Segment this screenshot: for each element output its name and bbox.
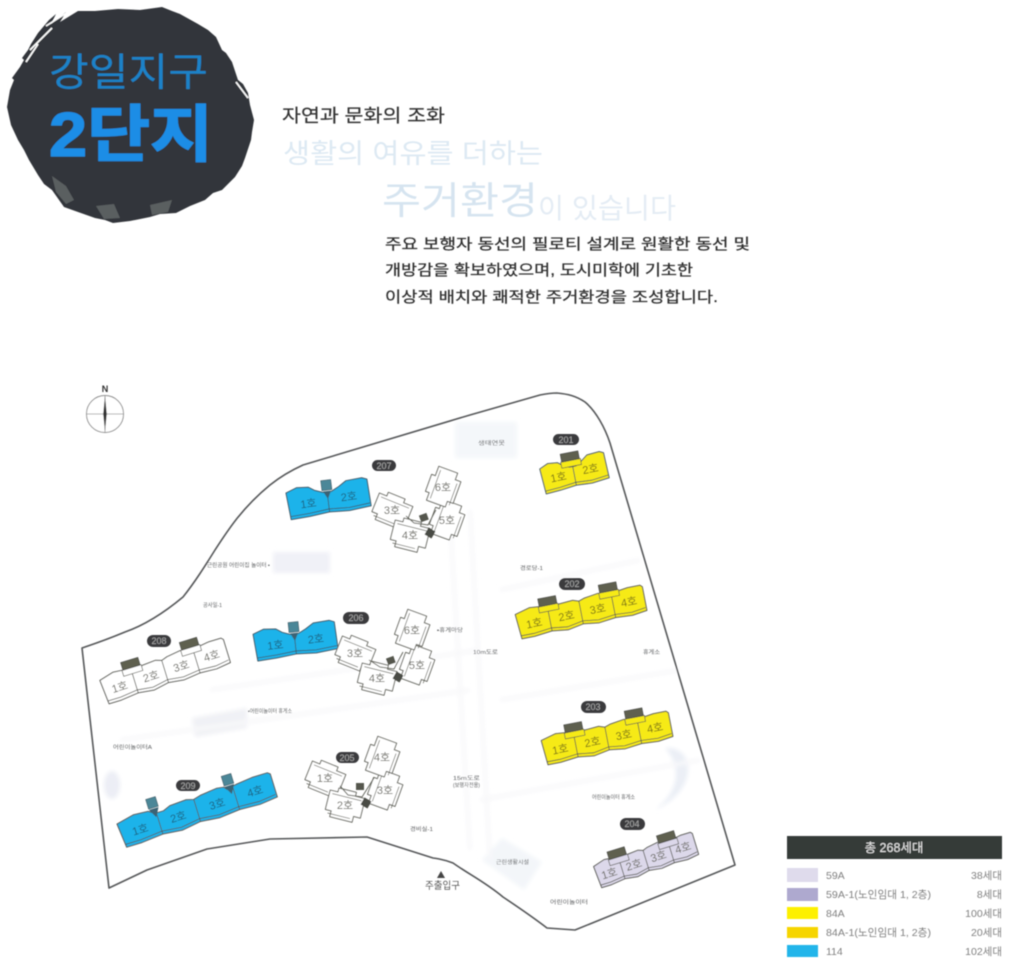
small facility labels: 생태연못 xyxy=(478,439,505,447)
main entrance label with arrow: 주출입구 xyxy=(425,879,460,892)
building 207 blue: 5호 xyxy=(439,514,455,527)
site boundary xyxy=(82,393,735,930)
legend row 114: 102세대 xyxy=(965,946,1002,958)
building 201 yellow: 2호 xyxy=(581,461,600,477)
building 208 white xyxy=(96,630,232,704)
badge: ink circle with title xyxy=(7,7,254,223)
building 206 blue: 206 xyxy=(348,613,364,623)
title: district name: 강일지구 xyxy=(49,52,208,95)
small facility labels: 어린이놀이터 휴게소 xyxy=(592,793,635,801)
small facility labels: 경로당-1 xyxy=(520,565,543,572)
building 204 lavender: 2호 xyxy=(624,857,644,874)
heading block xyxy=(282,106,676,224)
building 207 blue: 4호 xyxy=(402,529,418,542)
building 203 yellow: 1호 xyxy=(551,742,570,758)
small facility labels: ▪휴게마당 xyxy=(437,626,463,634)
legend row 59A-1: 8세대 xyxy=(977,889,1002,901)
legend row 84A xyxy=(787,907,1002,920)
building 206 blue: 5호 xyxy=(409,659,425,672)
legend row 84A: 84A xyxy=(826,908,845,920)
building 207 blue: 2호 xyxy=(340,489,358,504)
legend row 59A-1: 59A-1(노인임대 1, 2층) xyxy=(826,888,931,901)
small facility labels: 15m도로 xyxy=(453,775,480,782)
building 202 yellow: 4호 xyxy=(620,594,638,610)
title: complex number: 2단지 xyxy=(49,101,213,170)
building 207 blue: 1호 xyxy=(300,496,317,511)
faint site background features xyxy=(104,422,700,890)
building 209 blue: 2호 xyxy=(169,809,188,826)
building 202 yellow: 1호 xyxy=(525,616,544,632)
building 209 blue: 3호 xyxy=(208,796,227,813)
small facility labels: ▪어린이놀이터 휴게소 xyxy=(248,707,292,715)
building 202 yellow: 202 xyxy=(564,579,580,589)
building 207 blue: 6호 xyxy=(435,481,451,494)
ink blob xyxy=(7,7,254,223)
small facility labels: 어린이놀이터A xyxy=(113,743,152,751)
pale heading line two: 주거환경 xyxy=(382,181,538,223)
legend header xyxy=(787,836,1002,859)
building 202 yellow: 3호 xyxy=(589,601,607,617)
building 204 lavender: 3호 xyxy=(649,848,668,865)
building 204 lavender: 4호 xyxy=(673,840,693,857)
small facility labels: 경비실-1 xyxy=(410,825,433,833)
description text: 개방감을 확보하였으며, 도시미학에 기초한 xyxy=(385,262,693,279)
building 205 white: 205 xyxy=(339,753,355,763)
building 205 white: 3호 xyxy=(377,784,393,797)
building 205 white: 1호 xyxy=(317,772,333,785)
small facility labels: 어린이놀이터 xyxy=(550,898,588,906)
legend header: 총 268세대 xyxy=(865,841,923,855)
building 209 blue: 4호 xyxy=(246,783,265,800)
ink blob white streaks xyxy=(26,12,248,98)
building 201 yellow: 201 xyxy=(558,435,574,445)
description text: 주요 보행자 동선의 필로티 설계로 원활한 동선 및 xyxy=(385,236,750,253)
building 203 yellow: 2호 xyxy=(583,734,602,750)
legend row 84A-1: 84A-1(노인임대 1, 2층) xyxy=(826,926,931,939)
building 207 blue: 207 xyxy=(376,461,392,471)
small facility labels: 10m도로 xyxy=(473,649,498,656)
pale heading line one: 생활의 여유를 더하는 xyxy=(283,139,543,169)
building 204 lavender xyxy=(590,818,700,888)
building 202 yellow: 2호 xyxy=(557,608,576,624)
building 208 white: 208 xyxy=(151,636,167,646)
legend row 84A-1 xyxy=(787,926,1002,939)
building 205 white xyxy=(303,735,405,824)
site plan xyxy=(82,393,735,930)
building 207 blue: 3호 xyxy=(384,504,400,517)
building 206 blue: 4호 xyxy=(369,672,385,685)
building 206 blue: 3호 xyxy=(347,647,363,660)
building 204 lavender: 204 xyxy=(624,819,640,829)
icon: north compass: N xyxy=(102,384,108,394)
building 208 white: 1호 xyxy=(110,679,129,696)
small facility labels: 근린생활시설 xyxy=(496,858,529,866)
building 203 yellow: 203 xyxy=(585,702,601,712)
small facility labels: 공사일-1 xyxy=(203,601,222,609)
building 203 yellow: 4호 xyxy=(646,720,664,736)
building 208 white: 4호 xyxy=(202,648,221,665)
building 206 blue: 1호 xyxy=(267,638,284,653)
building 206 blue xyxy=(252,608,437,697)
building 207 blue xyxy=(285,460,467,554)
building 208 white: 2호 xyxy=(141,668,161,685)
building 206 blue: 2호 xyxy=(307,632,325,647)
legend row 59A-1 xyxy=(787,888,1002,901)
building 209 blue: 1호 xyxy=(131,821,150,839)
ink blob lighter patches xyxy=(52,176,172,219)
legend row 59A: 59A xyxy=(826,870,845,882)
building 209 blue xyxy=(113,763,278,848)
building 204 lavender: 1호 xyxy=(600,865,619,882)
building 201 yellow xyxy=(538,434,610,494)
building 209 blue: 209 xyxy=(180,781,196,791)
description text xyxy=(385,236,750,306)
small facility labels: 휴게소 xyxy=(643,648,660,656)
building 205 white: 4호 xyxy=(374,751,390,764)
building 208 white: 3호 xyxy=(172,658,191,675)
small facility labels: (보행자전용) xyxy=(453,781,480,789)
building 202 yellow xyxy=(513,577,648,639)
heading line: 자연과 문화의 조화 xyxy=(282,106,445,126)
building 205 white: 2호 xyxy=(337,799,353,812)
description text: 이상적 배치와 쾌적한 주거환경을 조성합니다. xyxy=(385,289,718,306)
legend row 84A-1: 20세대 xyxy=(971,927,1002,939)
small facility labels xyxy=(113,439,660,906)
building 203 yellow: 3호 xyxy=(615,727,633,743)
legend row 114: 114 xyxy=(826,946,843,958)
building 201 yellow: 1호 xyxy=(549,470,568,485)
legend row 59A xyxy=(787,868,1002,882)
legend row 114 xyxy=(787,945,1002,958)
small facility labels: 근린공원 어린이집 놀이터 ▪ xyxy=(207,561,270,569)
building 203 yellow xyxy=(539,701,674,765)
legend row 84A: 100세대 xyxy=(965,908,1002,920)
main entrance label with arrow xyxy=(425,871,460,892)
building 206 blue: 6호 xyxy=(404,624,420,637)
icon: north compass xyxy=(86,384,124,433)
legend row 59A: 38세대 xyxy=(971,870,1002,882)
pale heading line two suffix: 이 있습니다 xyxy=(538,193,676,224)
legend: household totals xyxy=(787,836,1002,958)
